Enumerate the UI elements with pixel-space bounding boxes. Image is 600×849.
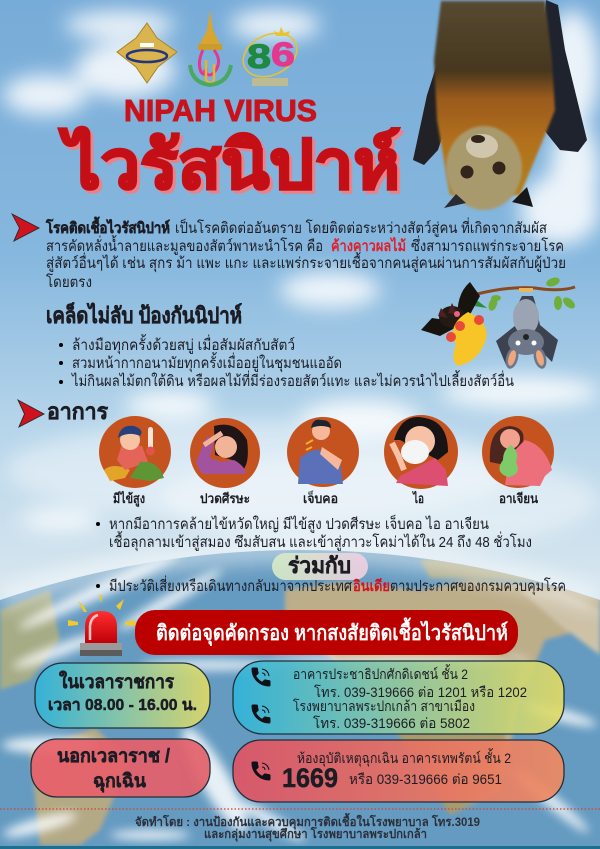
logo: 86 anniversary: 8 <box>247 38 271 76</box>
symptom labels: ปวดศีรษะ <box>200 491 250 506</box>
panel: office hours contacts: โทร. 039-319666 ต่อ 1201 หรือ 1202 <box>314 684 527 700</box>
panel: office hours contacts: โรงพยาบาลพระปกเกล้า สาขาเมือง <box>293 698 475 714</box>
footer: credits <box>135 812 480 842</box>
ears <box>444 194 466 208</box>
icon: phone <box>252 668 270 686</box>
text block: intro: สารคัดหลั่งน้ำลายและมูลของสัตว์พาหะนำโรค คือ <box>46 235 323 255</box>
symptom labels: มีไข้สูง <box>113 490 145 507</box>
text block: intro <box>45 216 566 291</box>
logo: royal emblem <box>190 10 231 85</box>
symptom labels: ไอ <box>411 490 424 506</box>
symptom: sore throat icon <box>287 417 359 487</box>
badge: together with: ร่วมกับ <box>288 553 351 578</box>
panel: emergency contacts: หรือ 039-319666 ต่อ 9651 <box>349 771 502 787</box>
branch <box>477 287 575 294</box>
logo: 86 anniversary: 6 <box>271 36 295 74</box>
text block: symptom warning: หากมีอาการคล้ายไข้หวัดใหญ่ มีไข้สูง ปวดศีรษะ เจ็บคอ ไอ อาเจียน <box>109 514 489 533</box>
banner: contact screening point <box>135 610 518 655</box>
icon: phone <box>252 705 270 723</box>
list: prevention tips: ล้างมือทุกครั้งด้วยสบู่ เมื่อสัมผัสกับสัตว์ <box>72 334 295 355</box>
symptom: headache icon <box>190 418 260 488</box>
panel: office hours contacts: โทร. 039-319666 ต่อ 5802 <box>313 715 470 731</box>
text block: travel risk <box>96 575 566 596</box>
heading: prevention tips: เคล็ดไม่ลับ ป้องกันนิปาห์ <box>46 301 242 328</box>
panel: emergency contacts <box>233 740 564 802</box>
banner: contact screening point: ติดต่อจุดคัดกรอง หากสงสัยติดเชื้อไวรัสนิปาห์ <box>156 617 508 647</box>
panel: after hours label <box>31 739 210 797</box>
symptom: fever icon <box>99 416 171 488</box>
text block: travel risk: ตามประกาศของกรมควบคุมโรค <box>390 577 566 596</box>
background: earth globe <box>0 540 600 849</box>
body <box>434 1 555 195</box>
panel: office hours label <box>35 663 210 728</box>
symptom labels <box>113 489 538 507</box>
list: prevention tips <box>59 334 514 390</box>
photo: hanging fruit bat <box>413 0 587 210</box>
panel: emergency contacts: 1669 <box>282 763 338 793</box>
logos row <box>117 10 304 86</box>
leaves <box>470 276 577 312</box>
eyes and nose <box>460 135 506 178</box>
text block: intro: โรคติดเชื้อไวรัสนิปาห์ <box>45 216 170 237</box>
symptom labels: เจ็บคอ <box>303 489 338 506</box>
panel: office hours contacts: อาคารประชาธิปกศักดิเดชน์ ชั้น 2 <box>293 664 468 682</box>
black bat <box>421 282 480 336</box>
text block: symptom warning <box>96 514 532 552</box>
text block: intro: เป็นโรคติดต่ออันตราย โดยติดต่อระหว่างสัตว์สู่คน ที่เกิดจากสัมผัส <box>175 217 547 237</box>
mango <box>453 312 487 366</box>
text block: intro: ซึ่งสามารถแพร่กระจายโรค <box>411 235 564 255</box>
icon: phone <box>252 762 270 780</box>
heading: NIPAH VIRUS: NIPAH VIRUS <box>124 93 317 128</box>
title: Thai virus name: ไวรัสนิปาห์ <box>62 129 403 206</box>
badge: together with <box>272 553 368 580</box>
text block: symptom warning: เชื้อลุกลามเข้าสู่สมอง ซึมสับสน และเข้าสู่ภาวะโคม่าได้ใน 24 ถึง 48 ชั่วโมง <box>109 531 532 552</box>
list: prevention tips: ไม่กินผลไม้ตกใต้ดิน หรือผลไม้ที่มีร่องรอยสัตว์แทะ และไม่ควรนำไปเลี้ยงสัตว์อื่น <box>71 370 514 390</box>
logo: 86 anniversary <box>236 25 304 86</box>
illustration: bats with mango <box>421 276 577 370</box>
arrow: symptoms <box>17 399 45 428</box>
icon: siren <box>68 595 135 656</box>
text block: intro: ค้างคาวผลไม้ <box>331 236 406 255</box>
title: Thai virus name: ไวรัสนิปาห์ <box>59 126 400 203</box>
head <box>446 126 522 210</box>
hanging bat <box>496 296 558 370</box>
panel: office hours label: เวลา 08.00 - 16.00 น. <box>48 697 197 714</box>
panel: after hours label: ฉุกเฉิน <box>93 771 146 793</box>
text block: travel risk: มีประวัติเสี่ยงหรือเดินทางกลับมาจากประเทศ <box>109 575 352 595</box>
text block: intro: โดยตรง <box>46 273 92 291</box>
panel: emergency contacts: ห้องอุบัติเหตุฉุกเฉิน อาคารเทพรัตน์ ชั้น 2 <box>297 748 511 767</box>
list: prevention tips: สวมหน้ากากอนามัยทุกครั้งเมื่ออยู่ในชุมชนแออัด <box>72 352 342 373</box>
right wing <box>540 0 587 152</box>
left wing <box>413 55 448 165</box>
heading: symptoms: อาการ <box>47 399 108 424</box>
virus marks <box>446 311 484 342</box>
footer: credits: และกลุ่มงานสุขศึกษา โรงพยาบาลพระปกเกล้า <box>204 826 427 842</box>
logo: gold diamond <box>117 23 177 83</box>
symptom: vomiting icon <box>482 416 554 488</box>
symptom labels: อาเจียน <box>499 491 538 506</box>
symptom: cough icon <box>384 415 458 489</box>
arrow: intro <box>11 213 40 242</box>
branch feet <box>519 288 533 292</box>
footer: credits: จัดทำโดย : งานป้องกันและควบคุมการติดเชื้อในโรงพยาบาล โทร.3019 <box>135 812 480 830</box>
panel: after hours label: นอกเวลาราช / <box>57 746 171 767</box>
panel: office hours label: ในเวลาราชการ <box>59 670 175 693</box>
text block: travel risk: อินเดีย <box>353 577 390 595</box>
panel: office hours contacts <box>233 661 564 734</box>
symptoms row <box>99 415 554 507</box>
